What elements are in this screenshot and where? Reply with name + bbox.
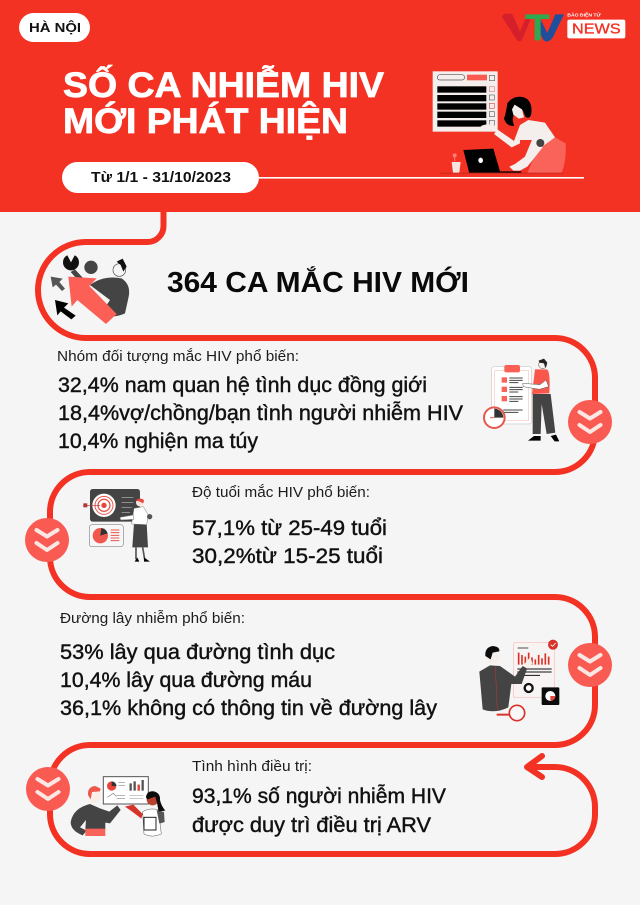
treatment subheading: Tình hình điều trị: [192, 758, 312, 775]
transmission stats: 36,1% không có thông tin về đường lây [60, 697, 438, 720]
heading: 364 new cases: 364 CA MẮC HIV MỚI [167, 265, 469, 299]
illustration: woman with laptop and list [433, 71, 566, 174]
logo: VTV News [502, 11, 625, 42]
transmission stats [60, 641, 438, 720]
chevron marker [568, 400, 612, 444]
risk groups stats [58, 374, 463, 453]
treatment stats: 93,1% số người nhiễm HIV [192, 785, 446, 808]
risk groups stats: 32,4% nam quan hệ tình dục đồng giới [58, 374, 427, 397]
date badge: Từ 1/1 - 31/10/2023 [91, 169, 231, 186]
logo: VTV News: NEWS [572, 22, 621, 38]
treatment stats: được duy trì điều trị ARV [192, 814, 431, 837]
treatment stats [192, 785, 446, 837]
chevron marker [26, 767, 70, 811]
risk groups stats: 10,4% nghiện ma túy [58, 430, 259, 453]
section: transmission routes [60, 610, 612, 721]
illustration: woman presenting target [83, 489, 152, 562]
title: SỐ CA NHIỄM HIV [63, 65, 385, 105]
age groups stats [192, 517, 387, 568]
illustration: two people with dashboard [71, 777, 165, 836]
title: MỚI PHÁT HIỆN [63, 101, 348, 141]
illustration: man with rising arrow [51, 254, 129, 324]
illustration: man with checklist [484, 359, 559, 441]
section: age groups [25, 484, 387, 568]
risk groups subheading: Nhóm đối tượng mắc HIV phổ biến: [57, 348, 299, 365]
section: treatment [26, 758, 446, 837]
age groups subheading: Độ tuổi mắc HIV phổ biến: [192, 484, 370, 501]
transmission subheading: Đường lây nhiễm phổ biến: [60, 610, 245, 627]
transmission stats: 10,4% lây qua đường máu [60, 669, 312, 692]
header panel [0, 0, 640, 212]
location badge: HÀ NỘI [29, 20, 81, 35]
title [63, 65, 385, 141]
connecting flow line with arrow [38, 212, 595, 854]
age groups stats: 30,2%từ 15-25 tuổi [192, 545, 383, 568]
chevron marker [568, 643, 612, 687]
age groups stats: 57,1% từ 25-49 tuổi [192, 517, 387, 540]
location badge [19, 13, 90, 42]
transmission stats: 53% lây qua đường tình dục [60, 641, 335, 664]
chevron marker [25, 518, 69, 562]
illustration: man with report [479, 640, 559, 721]
date badge [62, 162, 259, 193]
section: total cases [51, 254, 469, 324]
risk groups stats: 18,4%vợ/chồng/bạn tình người nhiễm HIV [58, 402, 463, 425]
section: risk groups [57, 348, 612, 453]
logo: VTV News: BÁO ĐIỆN TỬ [567, 11, 602, 19]
